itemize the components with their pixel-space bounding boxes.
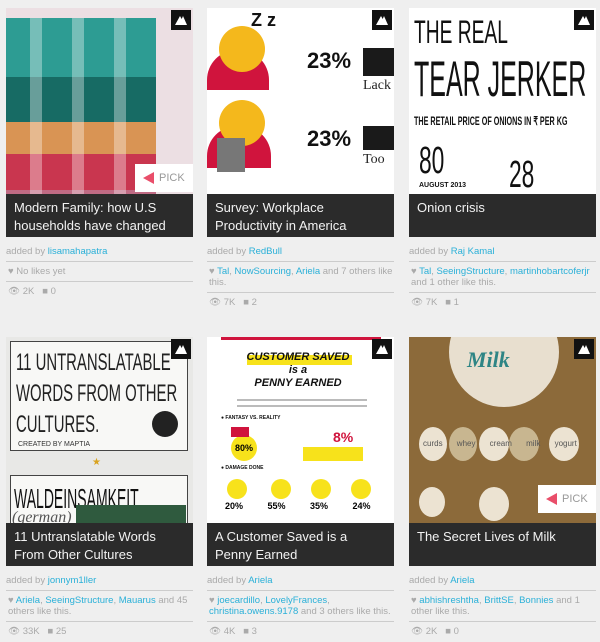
image: emoji survey: 23%	[307, 126, 351, 151]
image: handwritten words: WORDS FROM OTHER	[16, 380, 177, 407]
meta: ♥ No likes yet	[8, 266, 65, 277]
meta: 👁 4K ■ 3	[209, 626, 257, 637]
card: untranslatable words	[6, 337, 193, 637]
meta: 👁 2K ■ 0	[411, 626, 459, 637]
image: tear jerker text: THE REAL	[414, 14, 508, 50]
image: handwritten words	[6, 337, 193, 566]
image: tear jerker text: 28	[509, 154, 534, 196]
image: tear jerker text: THE RETAIL PRICE OF ONIONS IN ₹ PER KG	[414, 114, 568, 128]
caption	[207, 194, 394, 237]
meta	[409, 246, 596, 308]
image: milk tree	[409, 337, 596, 566]
meta: ♥ Tal, SeeingStructure, martinhobartcoferjr and 1 other like this.	[411, 266, 590, 288]
caption	[409, 523, 596, 566]
meta: ♥ abhishreshtha, BrittSE, Bonnies and 1 other like this.	[411, 595, 580, 617]
caption: Modern Family: how U.S households have changed	[14, 200, 166, 233]
meta	[409, 575, 596, 637]
image: tear jerker text: AUGUST 2013	[419, 182, 466, 189]
caption	[207, 523, 394, 566]
caption: 11 Untranslatable Words From Other Cultures	[14, 529, 156, 562]
meta: added by RedBull	[207, 246, 282, 257]
meta	[207, 246, 394, 308]
image: emoji survey	[207, 8, 394, 237]
card: onion crisis	[409, 8, 596, 308]
caption: Survey: Workplace Productivity in America	[215, 200, 346, 233]
image: yellow infographic: 80%	[235, 443, 253, 453]
meta: added by jonnym1ller	[6, 575, 96, 586]
card: modern family	[6, 8, 193, 297]
meta: ♥ Tal, NowSourcing, Ariela and 7 others like this.	[209, 266, 392, 288]
caption	[6, 523, 193, 566]
meta: ♥ joecardillo, LovelyFrances, christina.owens.9178 and 3 others like this.	[209, 595, 391, 617]
image: emoji survey: 23%	[307, 48, 351, 73]
image: handwritten words: CULTURES.	[16, 411, 99, 438]
image: yellow infographic: is a	[289, 364, 307, 376]
pick ribbon	[538, 485, 596, 513]
meta: 👁 7K ■ 2	[209, 297, 257, 308]
meta: 👁 2K ■ 0	[8, 286, 56, 297]
image: yellow infographic: ● DAMAGE DONE	[221, 465, 263, 471]
pick ribbon	[135, 164, 193, 192]
image: emoji survey: Lack	[363, 78, 391, 93]
meta: 👁 33K ■ 25	[8, 626, 66, 637]
card: survey workplace	[207, 8, 394, 308]
image: handwritten words: CREATED BY MAPTIA	[18, 441, 90, 448]
caption: A Customer Saved is a Penny Earned	[215, 529, 347, 562]
image: tear jerker text: JULY 2013	[509, 194, 544, 201]
meta	[6, 575, 193, 637]
image: stacked bar chart	[6, 8, 193, 237]
image: yellow infographic: PENNY EARNED	[254, 377, 342, 389]
caption	[409, 194, 596, 237]
image: emoji survey: Too	[363, 152, 385, 167]
meta: ♥ Ariela, SeeingStructure, Mauarus and 45 others like this.	[8, 595, 187, 617]
meta	[207, 575, 394, 637]
caption	[6, 194, 193, 237]
image: handwritten words: WALDEINSAMKEIT	[14, 483, 139, 514]
image: yellow infographic: 8%	[333, 429, 353, 445]
image: tear jerker text: TEAR JERKER	[414, 51, 586, 107]
image: emoji survey: 13%	[307, 204, 351, 229]
meta: added by lisamahapatra	[6, 246, 107, 257]
image: milk tree: curds whey cream milk yogurt	[423, 439, 577, 448]
image: yellow infographic: ● FANTASY VS. REALITY	[221, 415, 281, 421]
meta: added by Ariela	[409, 575, 475, 586]
image: handwritten words: 11 UNTRANSLATABLE	[16, 349, 171, 376]
meta: added by Ariela	[207, 575, 273, 586]
pick ribbon: PICK	[159, 172, 185, 184]
pick ribbon: PICK	[562, 493, 588, 505]
caption: The Secret Lives of Milk	[417, 529, 556, 544]
image: yellow infographic: 20% 55% 35% 24%	[225, 501, 371, 511]
image: yellow infographic: CUSTOMER SAVED	[247, 351, 349, 363]
meta	[6, 246, 193, 297]
meta: 👁 7K ■ 1	[411, 297, 459, 308]
image: milk tree: Milk	[467, 347, 510, 372]
card: milk	[409, 337, 596, 637]
card: customer saved	[207, 337, 394, 637]
image: handwritten words: ★	[92, 457, 101, 468]
image: yellow infographic	[207, 337, 394, 566]
meta: added by Raj Kamal	[409, 246, 495, 257]
image: handwritten words: (german)	[12, 509, 72, 526]
image: tear jerker text	[409, 8, 596, 237]
caption: Onion crisis	[417, 200, 485, 215]
image: emoji survey: Z z	[251, 10, 276, 30]
image: tear jerker text: 80	[419, 140, 444, 182]
